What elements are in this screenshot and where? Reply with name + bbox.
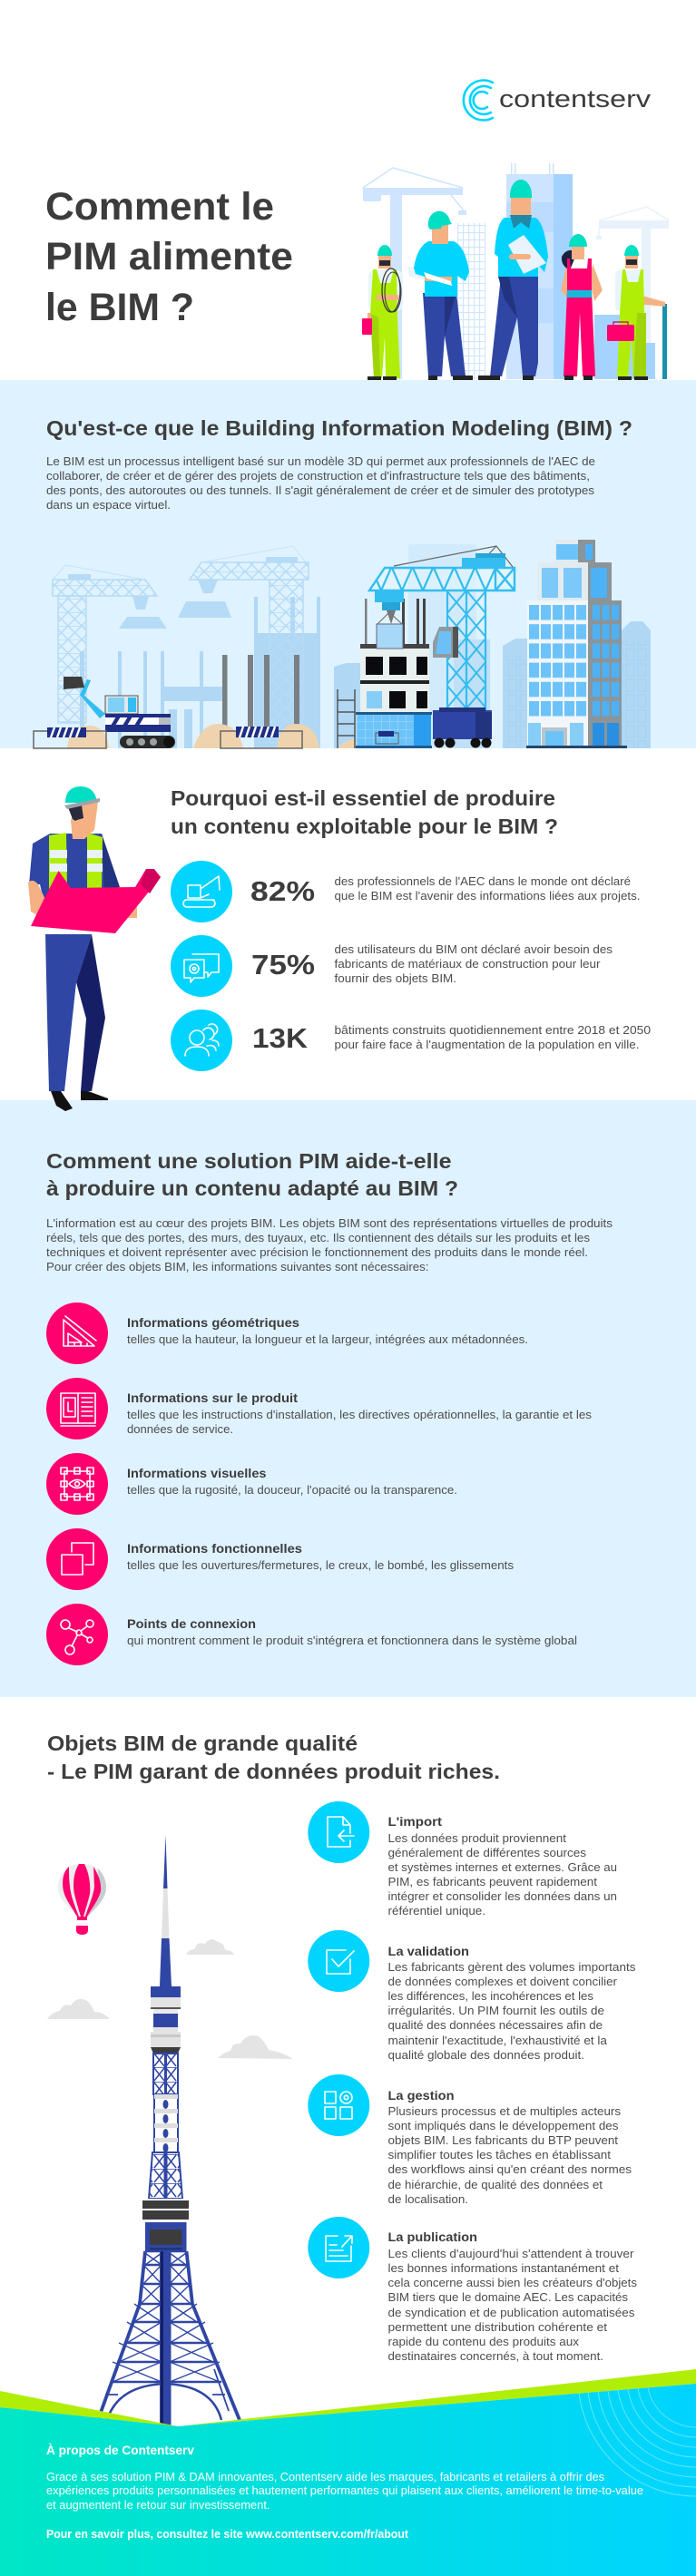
number: 13K [252, 1022, 309, 1054]
item title: Informations visuelles [127, 1466, 267, 1480]
illustration: tower crane [369, 546, 515, 747]
step text: référentiel unique. [388, 1904, 485, 1917]
item text [127, 1408, 592, 1436]
item text: telles que les ouvertures/fermetures, le creux, le bombé, les glissements [127, 1558, 514, 1572]
description: fabricants de matériaux de construction pour leur [334, 957, 601, 971]
illustration: worker with cable [362, 245, 403, 380]
step text: généralement de différentes sources [388, 1846, 586, 1859]
step text: rapide du contenu des produits aux [388, 2335, 579, 2348]
title: le BIM ? [45, 286, 194, 329]
step text: cela concerne aussi bien les créateurs d'objets [388, 2276, 637, 2289]
illustration: hot air balloon [58, 1864, 106, 1935]
number: 75% [251, 949, 315, 981]
panel: how PIM helps [46, 1149, 613, 1665]
icon: overlapping sheets [46, 1528, 108, 1590]
heading [46, 1149, 458, 1200]
item: product information [46, 1378, 592, 1439]
text block: dans un espace virtuel. [46, 498, 171, 512]
step text: PIM, es fabricants peuvent rapidement [388, 1875, 597, 1888]
step text: de hiérarchie, de qualité des données et [388, 2178, 603, 2191]
description [334, 1023, 651, 1051]
heading: à produire un contenu adapté au BIM ? [46, 1176, 458, 1200]
icon: chat gear [171, 935, 232, 997]
description [334, 874, 641, 903]
footer text [46, 2470, 643, 2512]
step text: simplifier toutes les tâches en établissant [388, 2148, 611, 2161]
footer text: expériences produits personnalisées et hautement performantes qui plaisent aux clients, améliorent le time-to-value [46, 2483, 643, 2497]
step text: les bonnes informations instantanément et [388, 2261, 619, 2275]
item text: telles que les instructions d'installation, les directives opérationnelles, la garantie et les [127, 1408, 592, 1421]
step title: La publication [388, 2230, 477, 2244]
footer text: et augmentent le retour sur investissement. [46, 2498, 270, 2512]
heading: Pourquoi est-il essentiel de produire [171, 786, 555, 810]
illustration: tall worker with document [478, 180, 548, 380]
icon: manual [46, 1378, 108, 1439]
step: import [308, 1801, 617, 1917]
logo [464, 80, 652, 120]
icon: publish document [308, 2217, 369, 2278]
illustration: excavator and barriers [34, 677, 356, 748]
step text [388, 1831, 617, 1917]
text block: collaborer, de créer et de gérer des projets de construction et d'infrastructure tels que des bâtiments, [46, 469, 590, 483]
decorative arcs [579, 2387, 696, 2496]
item text: telles que la rugosité, la douceur, l'opacité ou la transparence. [127, 1483, 457, 1497]
description: fournir des objets BIM. [334, 971, 456, 985]
stat: 75% [171, 935, 613, 997]
text block: L'information est au cœur des projets BIM. Les objets BIM sont des représentations virtuelles de produits [46, 1216, 613, 1230]
number: 82% [250, 875, 315, 907]
item title: Informations sur le produit [127, 1390, 298, 1405]
icon: grid and gear [308, 2074, 369, 2136]
illustration: worker holding plan [28, 786, 161, 1111]
lime accent band [0, 2369, 696, 2426]
footer gradient background [0, 2384, 696, 2576]
text block: des ponts, des autoroutes ou des tunnels. Il s'agit généralement de créer et de simuler des prototypes [46, 483, 594, 497]
text block: techniques et doivent représenter avec précision le fonctionnement des produits dans le monde réel. [46, 1245, 588, 1259]
step text: destinataires concernés, à tout moment. [388, 2349, 603, 2363]
item text: qui montrent comment le produit s'intégrera et fonctionnera dans le système global [127, 1634, 577, 1647]
icon: people [171, 1010, 232, 1071]
step text: irrégularités. Un PIM fournit les outils de [388, 2004, 604, 2017]
step text: Les données produit proviennent [388, 1831, 566, 1845]
heading [47, 1732, 500, 1783]
illustration: woman worker [561, 234, 603, 380]
description: pour faire face à l'augmentation de la population en ville. [334, 1038, 639, 1051]
step text: de localisation. [388, 2192, 468, 2206]
stat: 13K [171, 1010, 651, 1071]
step text: sont impliqués dans le développement des [388, 2119, 619, 2132]
heading: Objets BIM de grande qualité [47, 1732, 358, 1755]
step text: et systèmes internes et externes. Grâce au [388, 1860, 617, 1874]
step text [388, 2247, 637, 2363]
step text: Les clients d'aujourd'hui s'attendent à trouver [388, 2247, 634, 2260]
footer heading: À propos de Contentserv [46, 2443, 194, 2457]
step title: La validation [388, 1944, 469, 1958]
icon: file import [308, 1801, 369, 1863]
heading: un contenu exploitable pour le BIM ? [171, 815, 558, 838]
step text: de syndication et de publication automatisées [388, 2306, 635, 2319]
step text: objets BIM. Les fabricants du BTP peuvent [388, 2133, 618, 2147]
text block: Le BIM est un processus intelligent basé sur un modèle 3D qui permet aux professionnels de l'AEC de [46, 454, 595, 468]
item: geometric information [46, 1303, 528, 1364]
step text: intégrer et consolider les données dans un [388, 1889, 617, 1903]
icon: logo rings [464, 80, 493, 120]
icon: network nodes [46, 1604, 108, 1665]
text block: réels, tels que des portes, des murs, des tuyaux, etc. Ils contiennent des détails sur les produits et les [46, 1231, 590, 1244]
step text: qualité globale des données produit. [388, 2048, 584, 2062]
illustration: faded background city [53, 544, 651, 748]
step text: Plusieurs processus et de multiples acteurs [388, 2104, 621, 2118]
step text: maintenir l'exactitude, l'exhaustivité et la [388, 2034, 608, 2047]
footer text: Grace à ses solution PIM & DAM innovantes, Contentserv aide les marques, fabricants et retailers à offrir des [46, 2470, 604, 2483]
illustration: office tower [526, 540, 627, 748]
text block: Pour créer des objets BIM, les informations suivantes sont nécessaires: [46, 1260, 428, 1273]
description: des professionnels de l'AEC dans le monde ont déclaré [334, 874, 631, 888]
icon: crane [171, 861, 232, 922]
item: functional information [46, 1528, 514, 1590]
item title: Informations fonctionnelles [127, 1541, 302, 1556]
step text: qualité des données nécessaires afin de [388, 2018, 603, 2032]
description: que le BIM est l'avenir des informations liées aux projets. [334, 889, 641, 903]
heading [171, 786, 558, 838]
heading: Comment une solution PIM aide-t-elle [46, 1149, 452, 1173]
text block [46, 1216, 613, 1273]
step: validation [308, 1930, 636, 2062]
step text: les différences, les incohérences et les [388, 1989, 593, 2003]
item: visual information [46, 1453, 457, 1515]
illustration: worker with plans [407, 211, 473, 380]
title [45, 185, 293, 329]
item: connection points [46, 1604, 577, 1665]
step title: L'import [388, 1814, 442, 1829]
panel: what is BIM [34, 416, 651, 748]
icon: checkbox [308, 1930, 369, 1992]
illustration: worker with toolbox and cane [607, 245, 667, 380]
step title: La gestion [388, 2088, 454, 2103]
step text: des workflows ainsi qu'en créant des normes [388, 2162, 632, 2176]
text block [46, 454, 595, 512]
title: Comment le [45, 185, 274, 229]
icon: eye in frame [46, 1453, 108, 1515]
stat: 82% [171, 861, 641, 922]
footer link: Pour en savoir plus, consultez le site www.contentserv.com/fr/about [46, 2527, 409, 2541]
step text: Les fabricants gèrent des volumes importants [388, 1960, 636, 1974]
step: publication [308, 2217, 637, 2363]
item title: Points de connexion [127, 1616, 256, 1631]
illustration: grey pillars [222, 655, 299, 732]
description: bâtiments construits quotidiennement entre 2018 et 2050 [334, 1023, 651, 1037]
title: PIM alimente [45, 235, 293, 278]
step: management [308, 2074, 632, 2206]
icon: set square [46, 1303, 108, 1364]
step text: permettent une distribution cohérente et [388, 2320, 607, 2334]
item text: données de service. [127, 1422, 233, 1436]
step text: de données complexes et doivent concilier [388, 1975, 618, 1988]
item title: Informations géométriques [127, 1315, 299, 1330]
panel: footer [0, 2369, 696, 2576]
illustration: tower [98, 1835, 240, 2425]
panel: quality BIM objects [47, 1732, 637, 2425]
heading: Qu'est-ce que le Building Information Modeling (BIM) ? [46, 416, 632, 440]
panel: why BIM content [28, 786, 651, 1111]
step text: BIM tiers que le domaine AEC. Les capacités [388, 2290, 628, 2304]
illustration: construction site backdrop [363, 163, 669, 379]
step text [388, 2104, 632, 2206]
panel: header [45, 80, 669, 380]
heading: - Le PIM garant de données produit riches. [47, 1760, 500, 1783]
step text [388, 1960, 636, 2062]
illustration: building under construction [338, 599, 432, 748]
description: des utilisateurs du BIM ont déclaré avoir besoin des [334, 942, 613, 956]
item text: telles que la hauteur, la longueur et la largeur, intégrées aux métadonnées. [127, 1332, 528, 1346]
description [334, 942, 613, 985]
illustration: clouds [47, 1939, 293, 2059]
logo wordmark: contentserv [499, 85, 652, 112]
